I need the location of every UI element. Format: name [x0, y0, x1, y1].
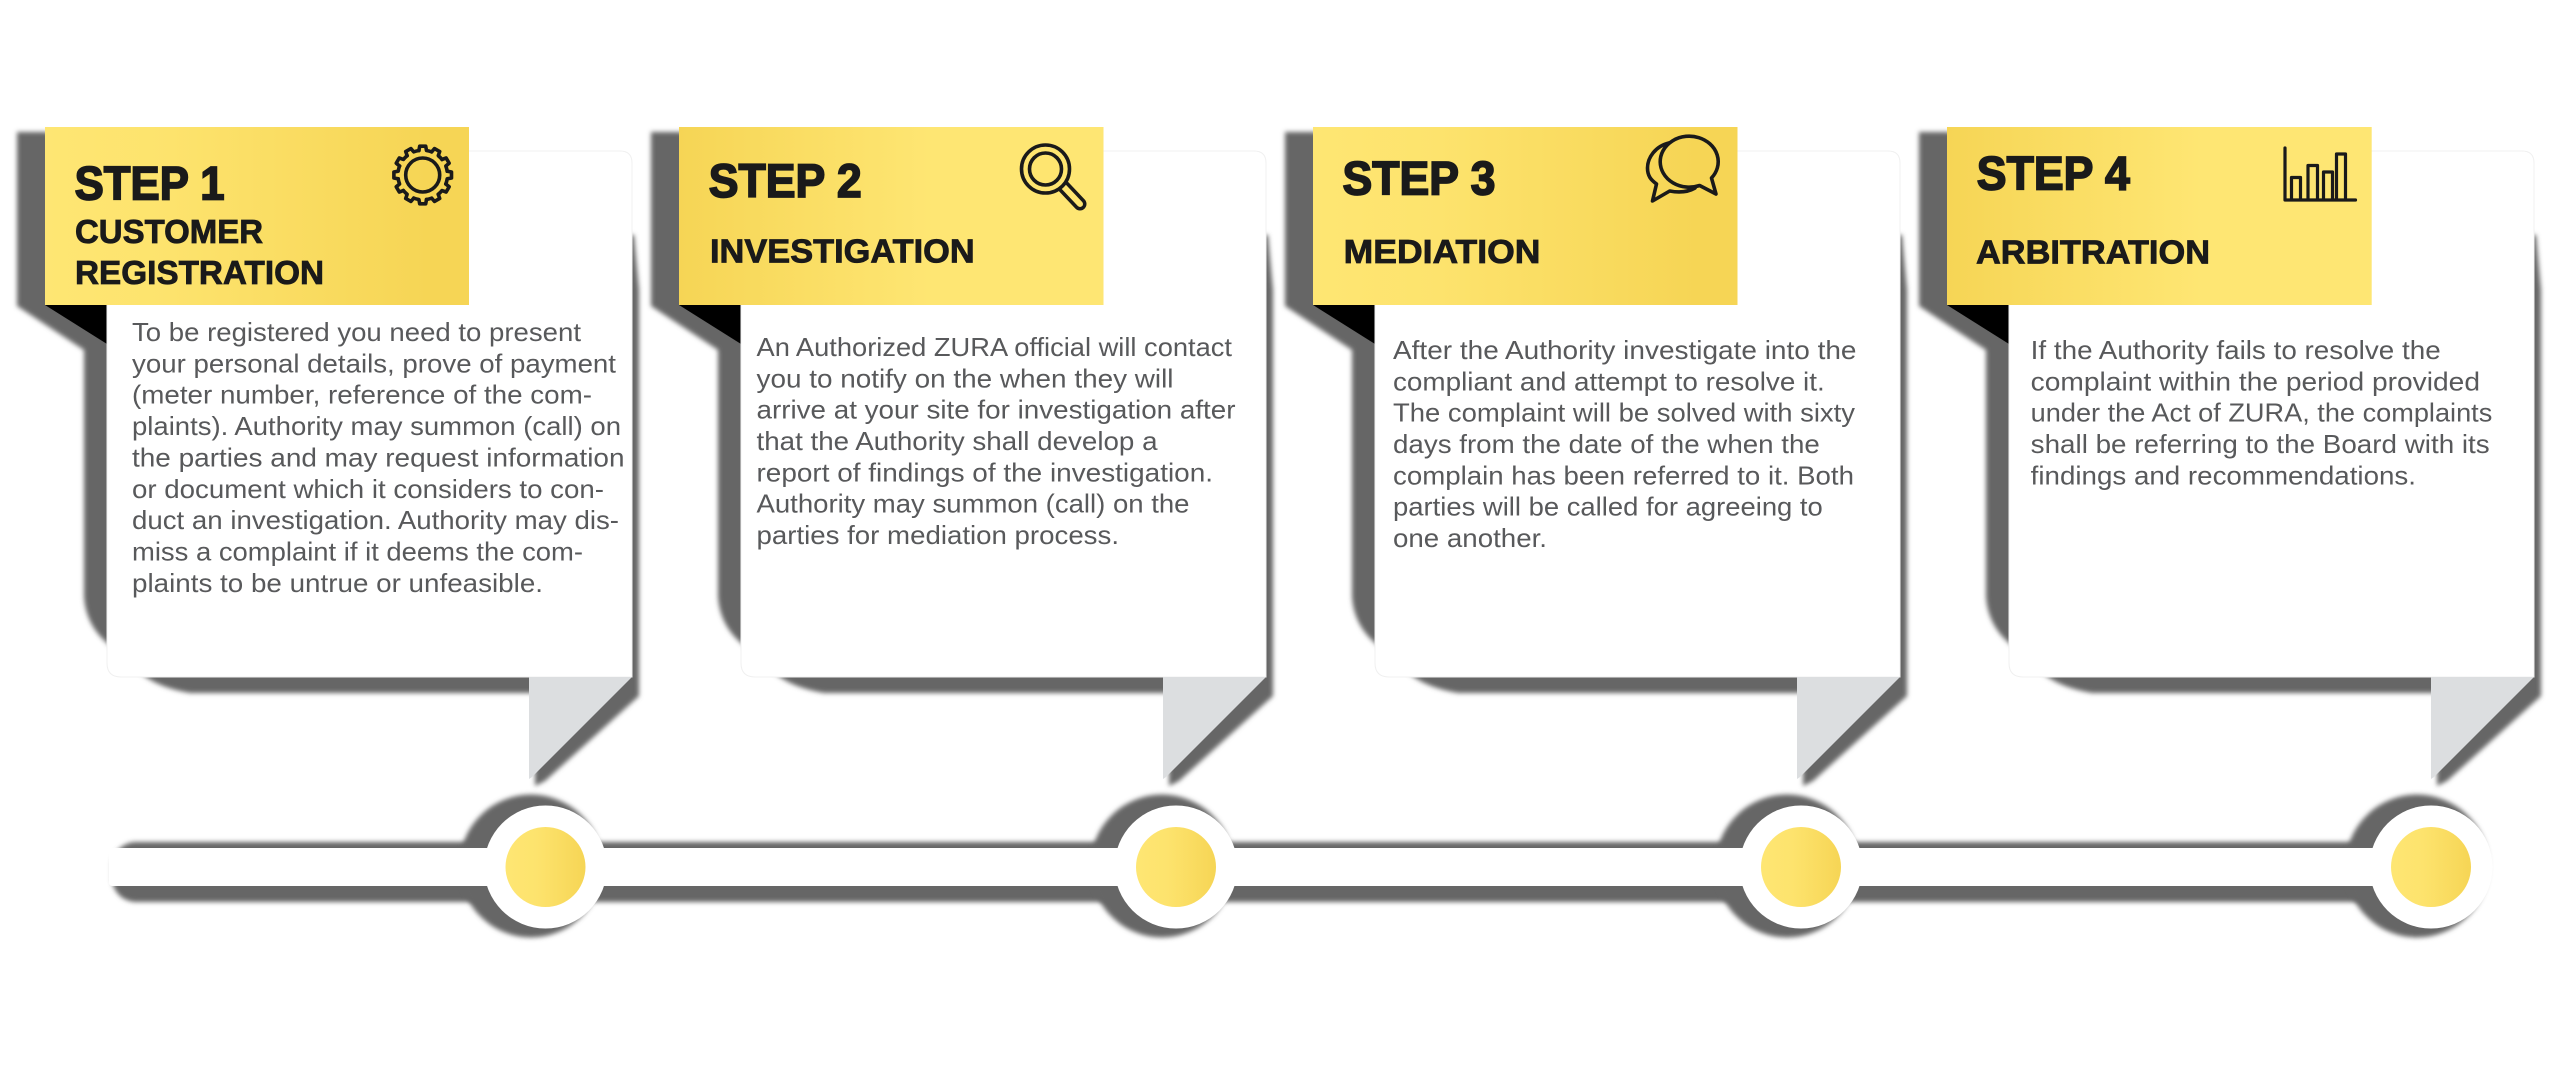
step 1 body text: miss a complaint if it deems the com-: [132, 536, 583, 566]
step 4 body text: If the Authority fails to resolve the: [2031, 335, 2441, 365]
step 1 body text: duct an investigation. Authority may dis-: [132, 505, 619, 535]
panel: step 3 mediation: [1285, 127, 1907, 786]
step 1 subtitle: CUSTOMER: [75, 214, 263, 251]
step 2 body text: report of findings of the investigation.: [756, 457, 1213, 487]
icon: gear: [393, 146, 452, 204]
step 1 body text: (meter number, reference of the com-: [132, 380, 592, 410]
step 2 title: STEP 2: [709, 154, 862, 207]
panel: step 2 investigation: [651, 127, 1273, 786]
marker 1: [506, 827, 586, 907]
step 3 body text: days from the date of the when the: [1393, 429, 1820, 459]
step 3 body text: complain has been referred to it. Both: [1393, 460, 1854, 490]
step 3 body text: [1393, 335, 1856, 553]
step 2 body text: that the Authority shall develop a: [756, 426, 1158, 456]
icon: bar chart: [2285, 148, 2356, 200]
marker 4: [2391, 827, 2471, 907]
step 4 body text: shall be referring to the Board with its: [2031, 429, 2490, 459]
step 1 body text: [132, 317, 624, 598]
panel: step 1 customer registration: [17, 127, 639, 786]
step 3 body text: After the Authority investigate into the: [1393, 335, 1856, 365]
step 1 subtitle: [75, 214, 324, 292]
timeline: [109, 794, 2492, 938]
step 2 body text: parties for mediation process.: [756, 520, 1119, 550]
step 3 body text: one another.: [1393, 523, 1547, 553]
step 1 body text: your personal details, prove of payment: [132, 348, 617, 378]
marker 2: [1136, 827, 1216, 907]
step 2 body text: you to notify on the when they will: [756, 363, 1174, 393]
step 1 body text: plaints). Authority may summon (call) on: [132, 411, 621, 441]
step 4 body text: under the Act of ZURA, the complaints: [2031, 398, 2492, 428]
icon: magnifying glass: [1022, 145, 1080, 204]
step 4 body text: findings and recommendations.: [2031, 460, 2416, 490]
step 4 body text: [2031, 335, 2492, 490]
panel: step 4 arbitration: [1919, 127, 2541, 786]
step 2 subtitle: INVESTIGATION: [710, 234, 975, 271]
step 4 header block: [1947, 127, 2372, 305]
step 2 header block: [679, 127, 1104, 305]
step 3 body text: parties will be called for agreeing to: [1393, 492, 1823, 522]
step 3 subtitle: MEDIATION: [1344, 234, 1540, 271]
step 3 body text: compliant and attempt to resolve it.: [1393, 366, 1825, 396]
icon: speech bubbles: [1648, 136, 1718, 201]
step 1 header block: [45, 127, 469, 305]
step 4 title: STEP 4: [1977, 146, 2130, 199]
step 4 body text: complaint within the period provided: [2031, 366, 2480, 396]
step 1 title: STEP 1: [75, 156, 225, 210]
step 1 body text: To be registered you need to present: [132, 317, 582, 347]
step 4 subtitle: ARBITRATION: [1976, 234, 2210, 271]
step 2 body text: Authority may summon (call) on the: [756, 489, 1190, 519]
step 1 body text: plaints to be untrue or unfeasible.: [132, 568, 543, 598]
step 1 subtitle: REGISTRATION: [75, 255, 324, 292]
step 3 header block: [1313, 127, 1738, 305]
marker 3: [1761, 827, 1841, 907]
step 2 body text: An Authorized ZURA official will contact: [756, 332, 1233, 362]
step 1 body text: the parties and may request information: [132, 442, 624, 472]
step 3 body text: The complaint will be solved with sixty: [1393, 398, 1855, 428]
step 2 body text: [756, 332, 1236, 550]
step 3 title: STEP 3: [1342, 152, 1496, 205]
step 1 body text: or document which it considers to con-: [132, 474, 604, 504]
step 2 body text: arrive at your site for investigation after: [756, 395, 1236, 425]
